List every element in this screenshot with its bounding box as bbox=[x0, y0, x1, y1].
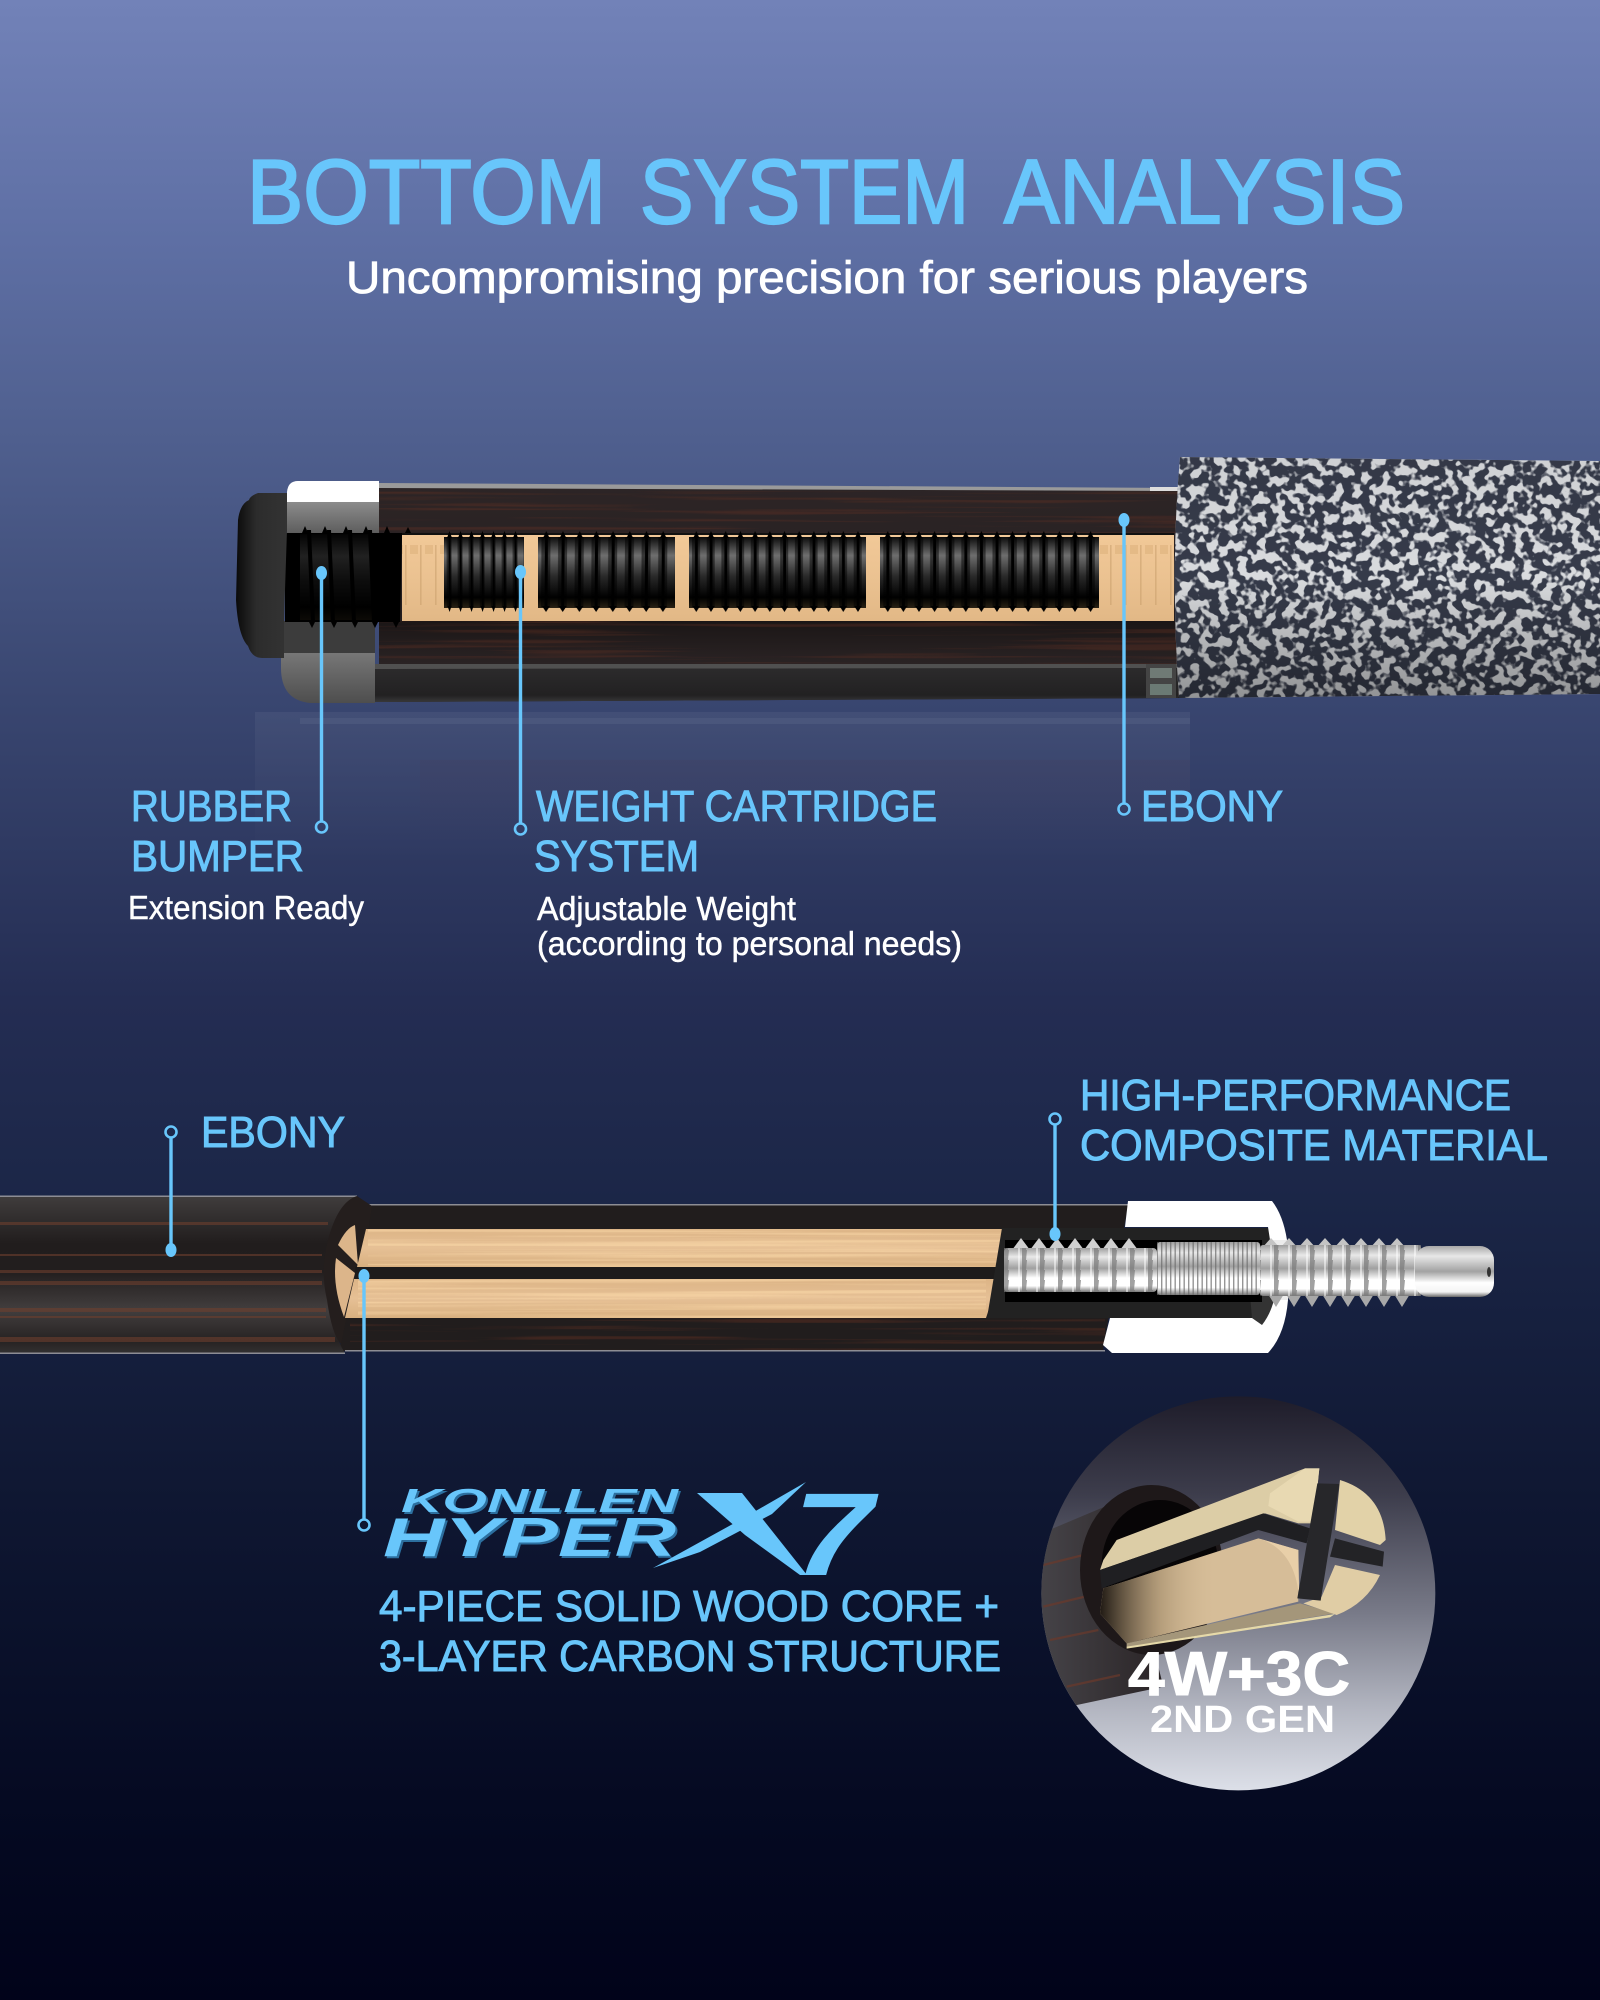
rubber bumper bbox=[236, 493, 287, 658]
logo: Konllen Hyper X7: KONLLEN bbox=[403, 1484, 682, 1521]
callout: ebony upper: EBONY bbox=[1141, 782, 1283, 831]
panel: cue butt cutaway bbox=[236, 450, 1600, 705]
butt collar and threads bbox=[281, 481, 411, 703]
reflection of cue butt bbox=[255, 712, 1190, 862]
logo: Konllen Hyper X7: 7 bbox=[793, 1469, 880, 1601]
callout: weight cartridge system: WEIGHT CARTRIDGE bbox=[536, 782, 937, 831]
badge: 4W+3C cross-section: 4W+3C bbox=[1128, 1640, 1350, 1709]
callout: ebony upper bbox=[1118, 513, 1283, 831]
outer ebony tube bbox=[0, 1196, 372, 1354]
wood core strips bbox=[345, 1229, 1002, 1318]
threaded pin bbox=[1004, 1238, 1494, 1307]
interior bore bbox=[987, 1228, 1280, 1318]
callout: high-performance composite material: HIGH-PERFORMANCE bbox=[1080, 1071, 1511, 1120]
logo: Konllen Hyper X7: HYPER bbox=[383, 1506, 676, 1568]
badge: 4W+3C cross-section: 2ND GEN bbox=[1150, 1699, 1335, 1741]
inner ebony section bbox=[340, 1204, 1130, 1352]
subtitle: Uncompromising precision for serious players bbox=[346, 252, 1308, 303]
callout: weight cartridge system: Adjustable Weight bbox=[537, 890, 796, 927]
callout: ebony lower bbox=[166, 1108, 345, 1257]
callout: high-performance composite material bbox=[1050, 1071, 1548, 1241]
tagline: 3-LAYER CARBON STRUCTURE bbox=[379, 1632, 1001, 1681]
callout: rubber bumper: BUMPER bbox=[131, 832, 304, 881]
callout: rubber bumper: RUBBER bbox=[131, 782, 292, 831]
wood core bbox=[402, 533, 1174, 621]
title bbox=[247, 142, 1405, 243]
callout: ebony lower: EBONY bbox=[201, 1108, 345, 1157]
callout: weight cartridge system bbox=[515, 565, 962, 962]
title: SYSTEM bbox=[640, 142, 969, 243]
leather grip bbox=[1165, 450, 1600, 705]
logo: Konllen Hyper X7: KONLLEN bbox=[401, 1482, 680, 1519]
logo: Konllen Hyper X7 bbox=[383, 1469, 880, 1601]
callout: weight cartridge system: (according to personal needs) bbox=[537, 925, 962, 962]
callout: rubber bumper bbox=[128, 566, 364, 926]
logo: Konllen Hyper X7: HYPER bbox=[385, 1508, 678, 1570]
callout: high-performance composite material: COMPOSITE MATERIAL bbox=[1080, 1121, 1548, 1170]
weight cartridges bbox=[444, 531, 1099, 612]
badge: 4W+3C cross-section bbox=[1033, 1396, 1435, 1790]
tagline: 4-PIECE SOLID WOOD CORE + bbox=[379, 1582, 999, 1631]
title: BOTTOM bbox=[247, 142, 606, 243]
tagline bbox=[379, 1582, 1001, 1681]
white ferrule bbox=[1103, 1201, 1290, 1353]
callout: rubber bumper: Extension Ready bbox=[128, 889, 364, 926]
leader: wood core to logo bbox=[358, 1269, 370, 1530]
panel: joint cutaway bbox=[0, 1196, 1494, 1354]
ebony body bbox=[375, 483, 1182, 702]
callout: weight cartridge system: SYSTEM bbox=[534, 832, 699, 881]
title: ANALYSIS bbox=[1004, 142, 1405, 243]
